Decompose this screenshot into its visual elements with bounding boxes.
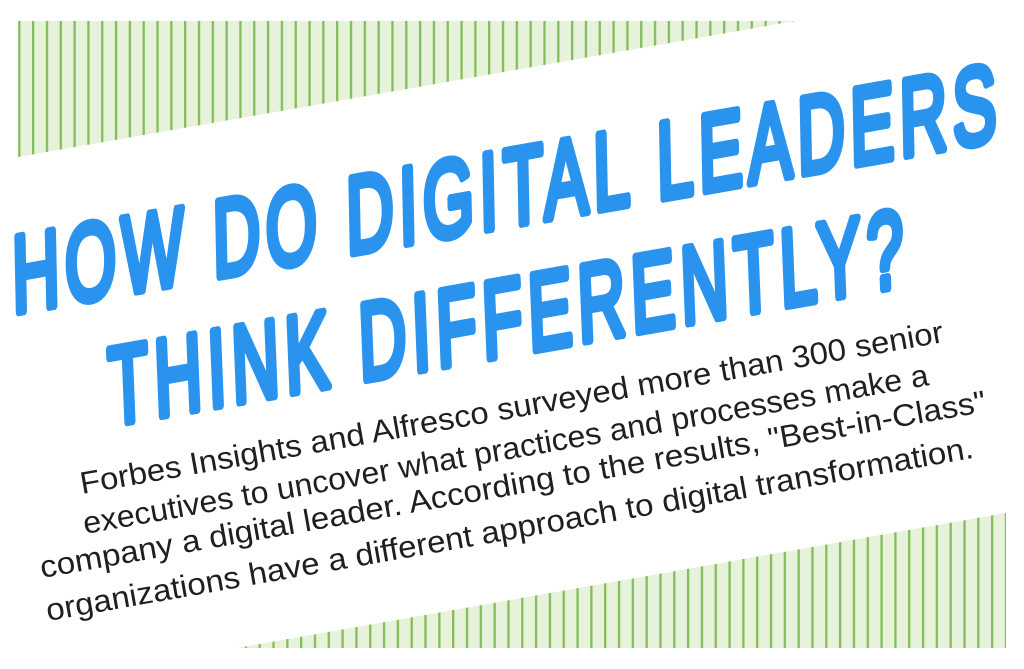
intro paragraph: company a digital leader. According to the results, "Best-in-Class" xyxy=(37,384,989,585)
intro paragraph: executives to uncover what practices and processes make a xyxy=(80,357,932,541)
title: HOW DO DIGITAL LEADERS xyxy=(11,42,997,337)
intro paragraph: organizations have a different approach to digital transformation. xyxy=(43,430,976,628)
intro paragraph xyxy=(37,314,989,628)
title: THINK DIFFERENTLY? xyxy=(106,187,906,449)
bottom green striped band xyxy=(237,513,1006,648)
top green striped band xyxy=(18,21,795,157)
intro paragraph: Forbes Insights and Alfresco surveyed more than 300 senior xyxy=(77,314,946,501)
